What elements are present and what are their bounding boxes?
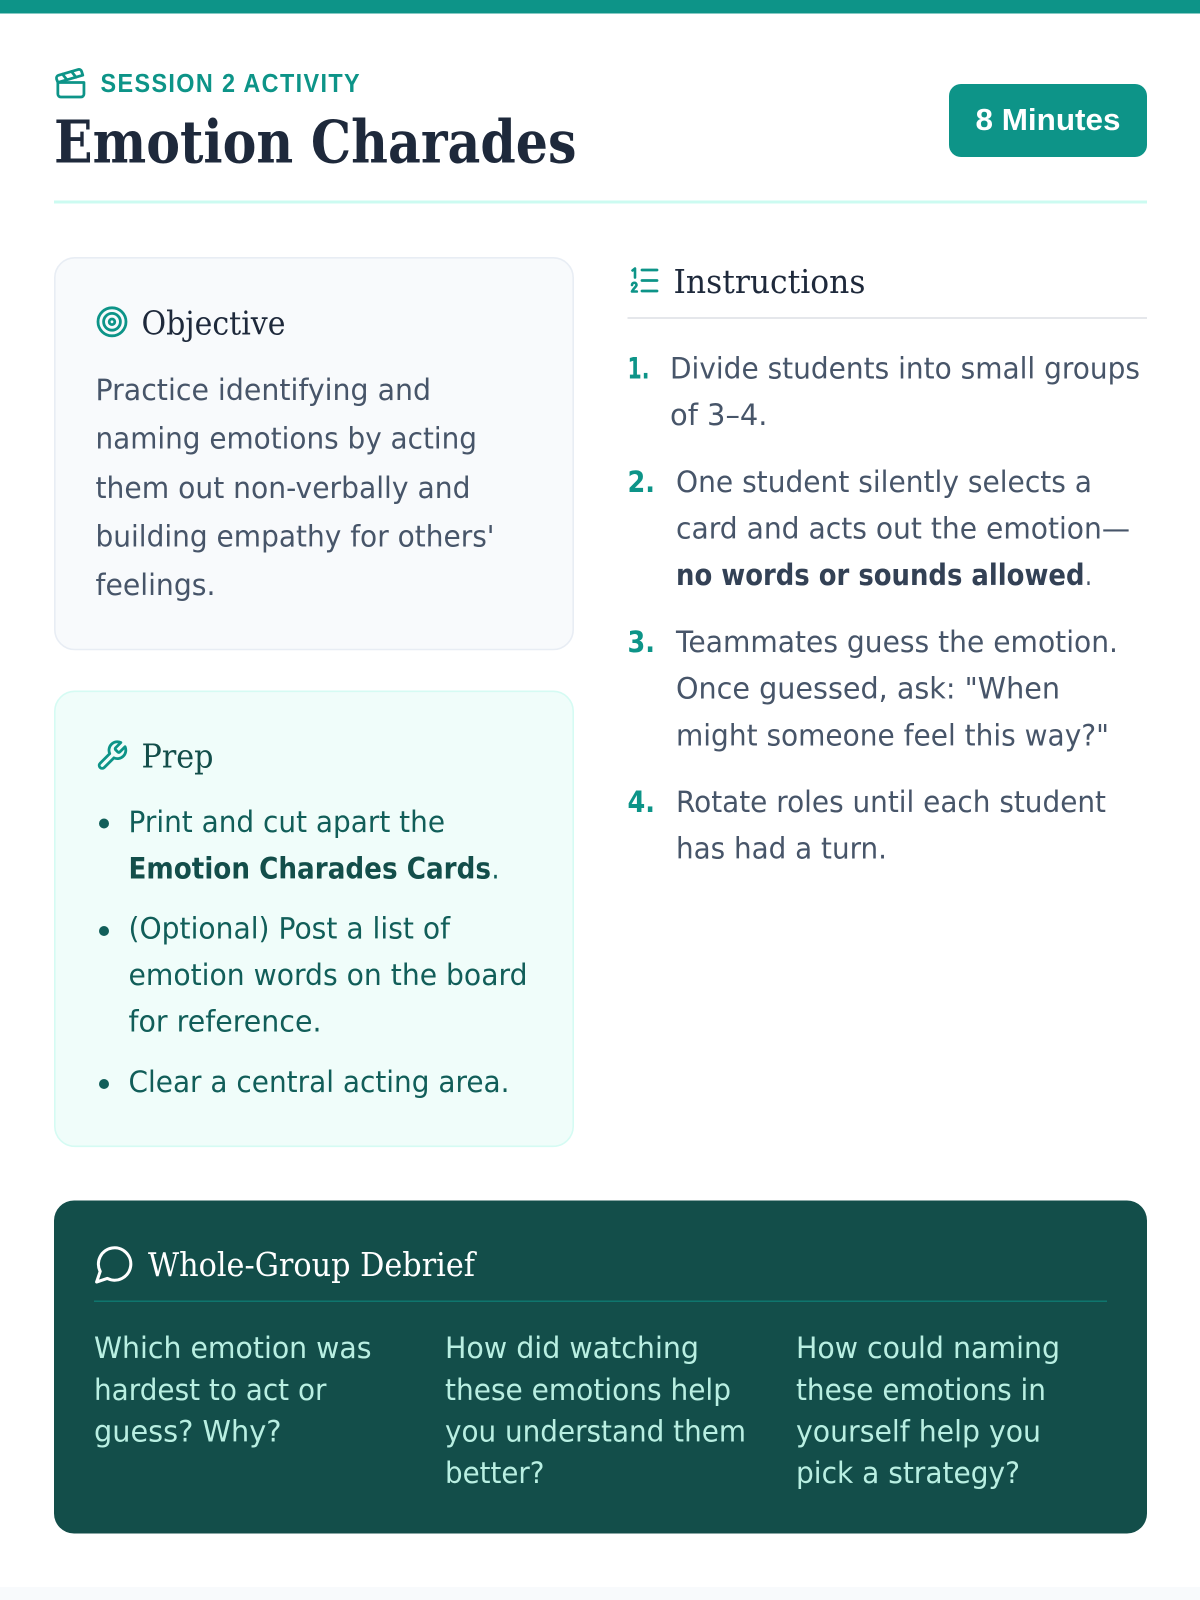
prep list: Emotion Charades Cards (128, 852, 491, 886)
prep heading: Prep (142, 736, 214, 776)
step 2: 2. (628, 465, 655, 499)
panel: prep (55, 691, 573, 1146)
objective text: feelings. (96, 568, 216, 602)
question 3: pick a strategy? (796, 1456, 1020, 1490)
question 1: hardest to act or (94, 1373, 327, 1407)
instructions rule (628, 317, 1147, 319)
debrief heading: Whole-Group Debrief (148, 1245, 478, 1284)
step 2 (628, 465, 1130, 592)
question 3: How could naming (796, 1331, 1060, 1365)
prep list (99, 805, 528, 1099)
panel: instructions (628, 262, 1147, 866)
icon: target (98, 308, 126, 336)
question 3 (796, 1331, 1060, 1490)
question 2: better? (445, 1456, 544, 1490)
objective text: building empathy for others' (96, 520, 494, 554)
icon: speech bubble (97, 1248, 131, 1282)
step 1: 1. (628, 352, 650, 386)
objective text: them out non-verbally and (96, 471, 470, 505)
panel: whole-group debrief (54, 1200, 1147, 1534)
step 1: Divide students into small groups (670, 352, 1140, 386)
panel: objective (55, 258, 573, 650)
prep list: . (492, 852, 500, 886)
instructions heading: Instructions (674, 262, 866, 301)
debrief rule (94, 1300, 1107, 1302)
question 1 (94, 1331, 372, 1448)
top accent bar (0, 0, 1200, 14)
eyebrow label: SESSION 2 ACTIVITY (100, 70, 361, 98)
step 4 (628, 785, 1106, 866)
duration badge: 8 Minutes (976, 102, 1120, 137)
title: Emotion Charades (54, 108, 576, 176)
step 4: 4. (628, 785, 655, 819)
prep list: Clear a central acting area. (128, 1065, 510, 1099)
objective text: naming emotions by acting (96, 422, 477, 456)
icon: clapperboard (56, 69, 84, 97)
prep list: for reference. (128, 1004, 322, 1038)
step 2: card and acts out the emotion— (676, 512, 1130, 546)
question 1: guess? Why? (94, 1414, 282, 1448)
prep list: Print and cut apart the (128, 805, 445, 839)
objective text: Practice identifying and (96, 373, 431, 407)
duration badge (949, 84, 1147, 157)
icon: wrench (99, 742, 126, 768)
question 2: you understand them (445, 1414, 746, 1448)
question 3: yourself help you (796, 1414, 1041, 1448)
step 4: has had a turn. (676, 832, 887, 866)
question 1: Which emotion was (94, 1331, 372, 1365)
question 2 (445, 1331, 746, 1490)
step 2: . (1085, 558, 1092, 592)
step 1 (628, 352, 1140, 432)
step 3: Teammates guess the emotion. (675, 625, 1118, 659)
header (54, 69, 1147, 203)
bottom band (0, 1587, 1200, 1600)
question 2: these emotions help (445, 1373, 731, 1407)
prep list: emotion words on the board (128, 958, 528, 992)
icon: numbered list (632, 268, 657, 292)
step 3: Once guessed, ask: "When (676, 672, 1060, 706)
step 3: 3. (628, 625, 655, 659)
step 2: no words or sounds allowed (676, 558, 1084, 592)
step 2: One student silently selects a (676, 465, 1092, 499)
objective heading: Objective (142, 304, 286, 342)
question 2: How did watching (445, 1331, 699, 1365)
step 3 (628, 625, 1118, 752)
step 1: of 3–4. (670, 398, 768, 432)
header rule (54, 200, 1147, 204)
step 3: might someone feel this way?" (676, 718, 1109, 752)
question 3: these emotions in (796, 1373, 1046, 1407)
step 4: Rotate roles until each student (676, 785, 1106, 819)
objective text (96, 373, 494, 602)
prep list: (Optional) Post a list of (128, 912, 451, 946)
